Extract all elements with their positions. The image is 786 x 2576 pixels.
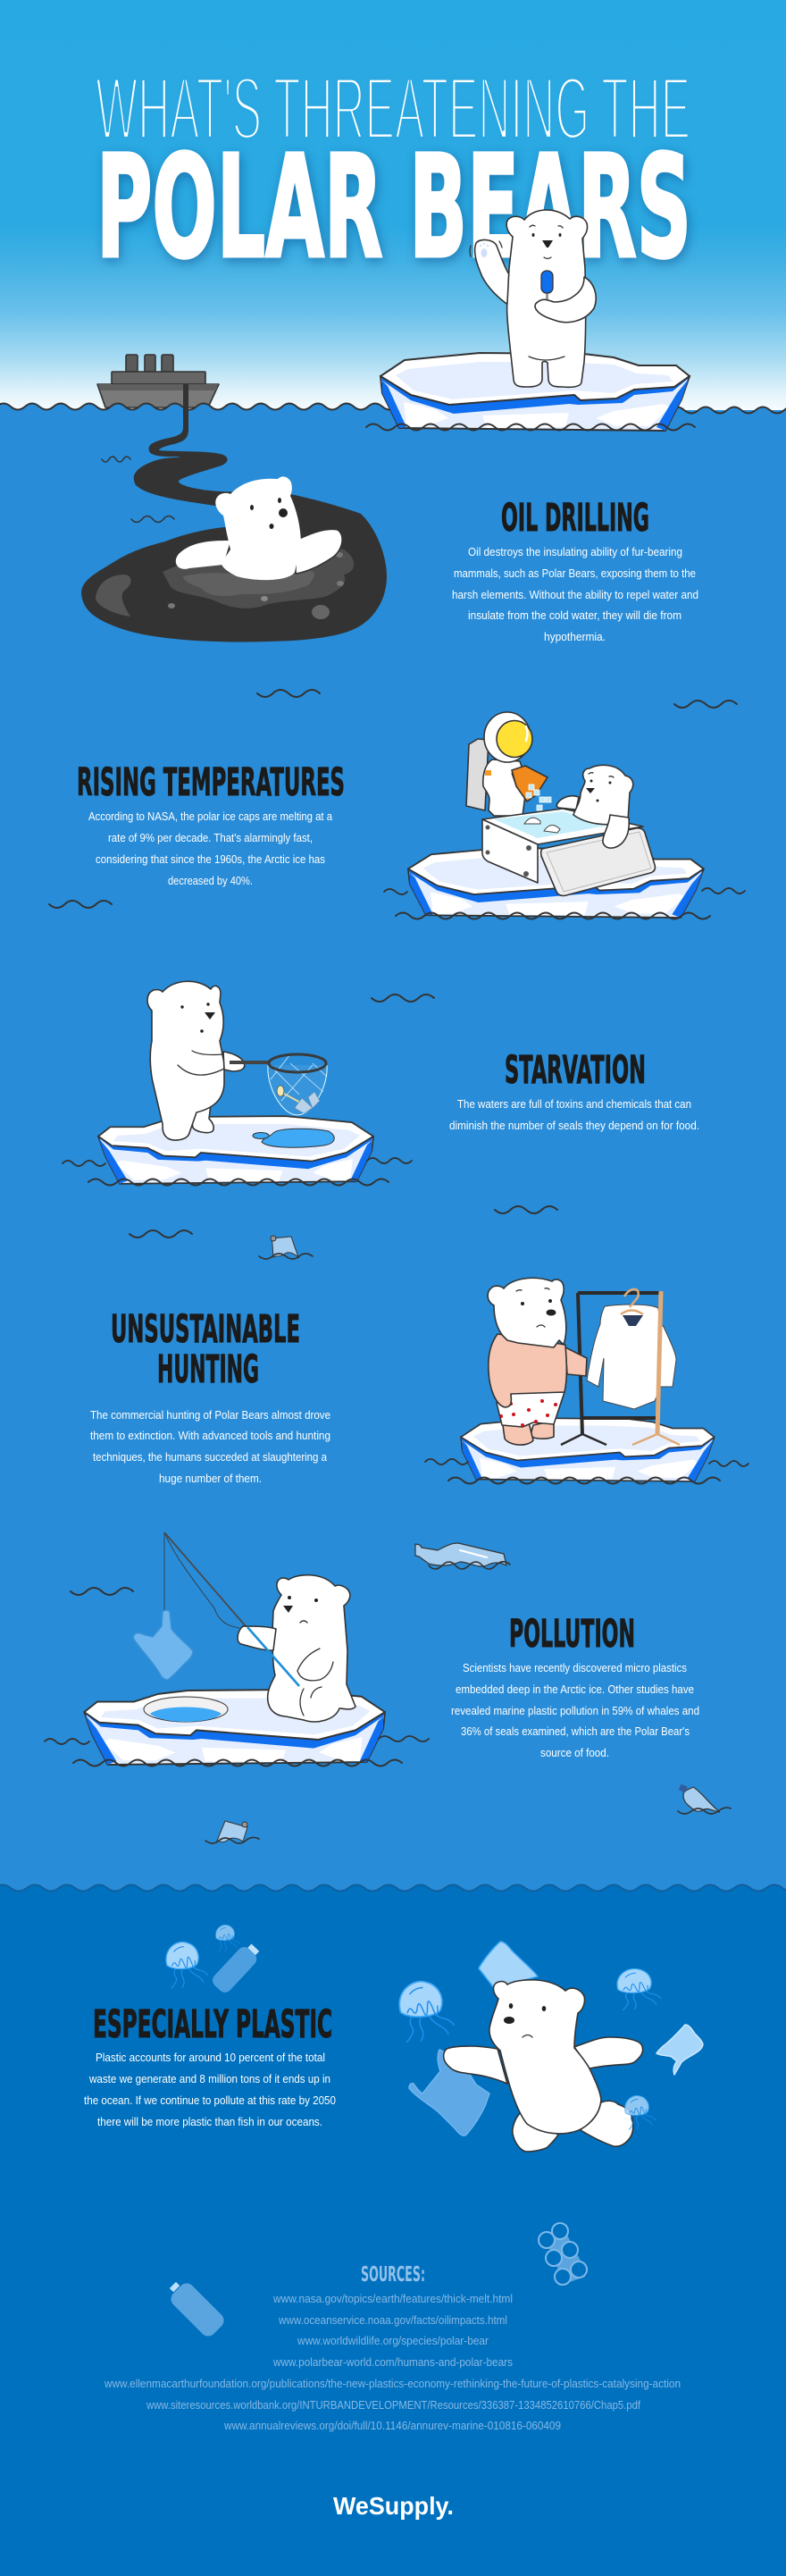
helmet xyxy=(484,712,531,762)
floating plastic around swimming bear xyxy=(399,1942,703,2135)
astronaut pouring ice xyxy=(466,712,558,817)
net contents xyxy=(277,1086,284,1096)
pollution text: revealed marine plastic pollution in 59% of whales and xyxy=(451,1705,699,1717)
oil drilling text: insulate from the cold water, they will die from xyxy=(468,609,681,622)
unsustainable hunting text: techniques, the humans succeded at slaughtering a xyxy=(93,1451,327,1464)
cooler top xyxy=(482,809,643,844)
glove xyxy=(512,774,527,786)
oil bear left arm xyxy=(176,541,230,569)
oil drilling text: Oil destroys the insulating ability of fur-bearing xyxy=(468,546,682,558)
especially plastic text xyxy=(84,2052,336,2128)
source links: www.oceanservice.noaa.gov/facts/oilimpacts.html xyxy=(278,2314,507,2327)
left arm xyxy=(444,2046,507,2084)
unsustainable hunting text: huge number of them. xyxy=(159,1473,262,1485)
backpack xyxy=(466,739,489,810)
cooler tub with bear xyxy=(482,765,655,895)
arms xyxy=(178,1051,224,1075)
rising temperatures text: considering that since the 1960s, the Arctic ice has xyxy=(96,853,325,866)
bear body xyxy=(506,210,588,387)
pollution heading: POLLUTION xyxy=(509,1613,635,1657)
starvation text: diminish the number of seals they depend on for food. xyxy=(449,1120,699,1132)
ice floe: fishing xyxy=(45,1690,429,1766)
fishing line xyxy=(164,1532,239,1628)
pollution text: Scientists have recently discovered micro plastics xyxy=(463,1662,687,1674)
translucent big bag xyxy=(409,2050,489,2135)
sources decorations xyxy=(163,2223,587,2339)
face xyxy=(521,1299,556,1315)
especially plastic text: Plastic accounts for around 10 percent of the total xyxy=(96,2052,325,2064)
water surface left and right xyxy=(0,404,786,424)
oil spill with bear xyxy=(81,476,387,642)
rising temperatures text: rate of 9% per decade. That's alarmingly fast, xyxy=(108,832,313,844)
oil bear right arm xyxy=(296,529,342,574)
ice lumps xyxy=(524,818,560,833)
source links: www.polarbear-world.com/humans-and-polar-bears xyxy=(272,2356,513,2369)
source links: www.worldwildlife.org/species/polar-bear xyxy=(297,2335,489,2347)
oil drilling text: hypothermia. xyxy=(544,631,606,643)
right leg xyxy=(581,2101,633,2146)
hooked plastic bag xyxy=(133,1610,193,1680)
right bag xyxy=(656,2025,703,2075)
swimming bear xyxy=(444,1980,656,2152)
bottle xyxy=(163,2276,227,2339)
bottle silhouette xyxy=(210,1940,263,1995)
cooler side xyxy=(482,819,538,883)
oil drilling text: mammals, such as Polar Bears, exposing them to the xyxy=(454,567,696,580)
oil bear face xyxy=(250,498,288,529)
especially plastic text: there will be more plastic than fish in our oceans. xyxy=(97,2116,322,2128)
holding arm xyxy=(535,277,596,323)
especially plastic text: the ocean. If we continue to pollute at this rate by 2050 xyxy=(84,2094,336,2107)
WeSupply logo: WeSupply. xyxy=(333,2492,454,2520)
jellyfish and bottle cluster xyxy=(166,1925,263,1995)
flag patch xyxy=(485,770,491,776)
starvation heading: STARVATION xyxy=(505,1049,646,1093)
starvation text: The waters are full of toxins and chemicals that can xyxy=(457,1098,691,1111)
net bag xyxy=(268,1065,327,1115)
oil drilling text: harsh elements. Without the ability to repel water and xyxy=(452,589,698,601)
ice floe: net scene xyxy=(63,1116,412,1185)
floating bottle xyxy=(415,1543,510,1569)
unsustainable hunting text xyxy=(90,1409,330,1485)
bear arm on rim xyxy=(556,796,579,810)
skinned bear in boxers xyxy=(488,1278,587,1445)
ice floe: hunting xyxy=(425,1418,748,1483)
small jellyfish at foot xyxy=(625,2095,656,2130)
legs xyxy=(531,1421,554,1439)
unsustainable hunting heading: UNSUSTAINABLE xyxy=(111,1308,300,1352)
small waves xyxy=(49,457,737,1595)
especially plastic text: waste we generate and 8 million tons of it ends up in xyxy=(88,2073,330,2085)
six-pack rings xyxy=(547,2227,585,2284)
floating plastic cup xyxy=(259,1236,313,1259)
rising temperatures text xyxy=(88,810,332,887)
cooler lid xyxy=(541,828,655,895)
oil drilling text xyxy=(452,546,698,643)
bear body xyxy=(268,1575,355,1722)
especially plastic heading: ESPECIALLY PLASTIC xyxy=(93,2003,332,2047)
rising temperatures text: According to NASA, the polar ice caps are melting at a xyxy=(88,810,332,823)
sky background xyxy=(0,0,786,411)
coat xyxy=(587,1305,676,1409)
pollution text: embedded deep in the Arctic ice. Other studies have xyxy=(456,1683,694,1696)
right arm xyxy=(574,2037,643,2068)
ship xyxy=(97,355,219,407)
face xyxy=(504,2003,546,2024)
source links: www.annualreviews.org/doi/full/10.1146/annurev-marine-010816-060409 xyxy=(223,2420,561,2432)
deep ocean xyxy=(0,1885,786,2576)
fishing bear with rod and bag xyxy=(133,1532,355,1722)
rod grip xyxy=(247,1627,299,1686)
rising temperatures heading: RISING TEMPERATURES xyxy=(77,761,345,805)
water xyxy=(494,811,612,838)
popsicle xyxy=(546,290,548,301)
floating bottle small xyxy=(678,1784,731,1814)
oil drilling heading: OIL DRILLING xyxy=(501,497,649,541)
bear holding net xyxy=(147,981,327,1140)
bear body xyxy=(147,981,224,1140)
sources heading: SOURCES: xyxy=(361,2263,425,2287)
back foot xyxy=(189,1090,213,1133)
starvation text xyxy=(449,1098,699,1132)
top bag xyxy=(479,1942,538,1988)
head xyxy=(488,1278,566,1347)
body and head xyxy=(489,1980,601,2134)
face xyxy=(283,1596,318,1613)
oil pipe and trail xyxy=(134,384,268,509)
paw xyxy=(238,1626,276,1650)
waving bear with popsicle xyxy=(470,210,596,387)
bear hanging arm xyxy=(603,815,629,848)
upper right jellyfish xyxy=(617,1968,661,2010)
paw pads xyxy=(480,243,489,257)
bear head and torso xyxy=(573,765,633,825)
bear face xyxy=(586,779,611,802)
ice floe: tub xyxy=(384,848,745,919)
rising temperatures text: decreased by 40%. xyxy=(168,875,253,887)
unsustainable hunting heading: HUNTING xyxy=(157,1348,259,1392)
ice hole xyxy=(144,1697,228,1722)
puddle xyxy=(262,1129,334,1147)
left jellyfish xyxy=(399,1982,454,2043)
source links: www.ellenmacarthurfoundation.org/publications/the-new-plastics-economy-rethinking-the-future-of-plastics-catalysing-action xyxy=(104,2378,681,2390)
net handle xyxy=(230,1061,269,1064)
visor xyxy=(497,720,532,758)
pollution text xyxy=(451,1662,699,1759)
pollution text: source of food. xyxy=(540,1747,609,1759)
torso xyxy=(489,1334,566,1407)
pollution text: 36% of seals examined, which are the Polar Bear's xyxy=(461,1725,690,1738)
arm xyxy=(565,1347,587,1376)
ocean water xyxy=(0,410,786,1902)
ice cubes xyxy=(526,785,558,817)
face xyxy=(532,233,561,248)
unsustainable hunting heading xyxy=(111,1308,300,1392)
unsustainable hunting text: The commercial hunting of Polar Bears almost drove xyxy=(90,1409,330,1422)
bucket xyxy=(512,766,548,801)
suit xyxy=(483,759,525,816)
oil bear body xyxy=(215,476,301,580)
boxers xyxy=(497,1392,564,1427)
rod xyxy=(164,1532,246,1626)
source links xyxy=(104,2293,681,2432)
clothes rack with fur coat xyxy=(561,1289,680,1445)
rack frame xyxy=(578,1293,659,1435)
net ring xyxy=(269,1054,326,1072)
hanger xyxy=(621,1289,643,1314)
ice floe: top xyxy=(366,353,695,431)
source links: www.nasa.gov/topics/earth/features/thick-melt.html xyxy=(272,2293,513,2305)
face xyxy=(180,1003,215,1033)
tan pole xyxy=(657,1291,661,1434)
floating cup xyxy=(205,1821,259,1843)
raised arm xyxy=(475,239,509,306)
source links: www.siteresources.worldbank.org/INTURBANDEVELOPMENT/Resources/336387-1334852610766/Chap5.pdf xyxy=(146,2399,640,2412)
unsustainable hunting text: them to extinction. With advanced tools and hunting xyxy=(90,1430,330,1442)
left leg xyxy=(513,2113,558,2152)
